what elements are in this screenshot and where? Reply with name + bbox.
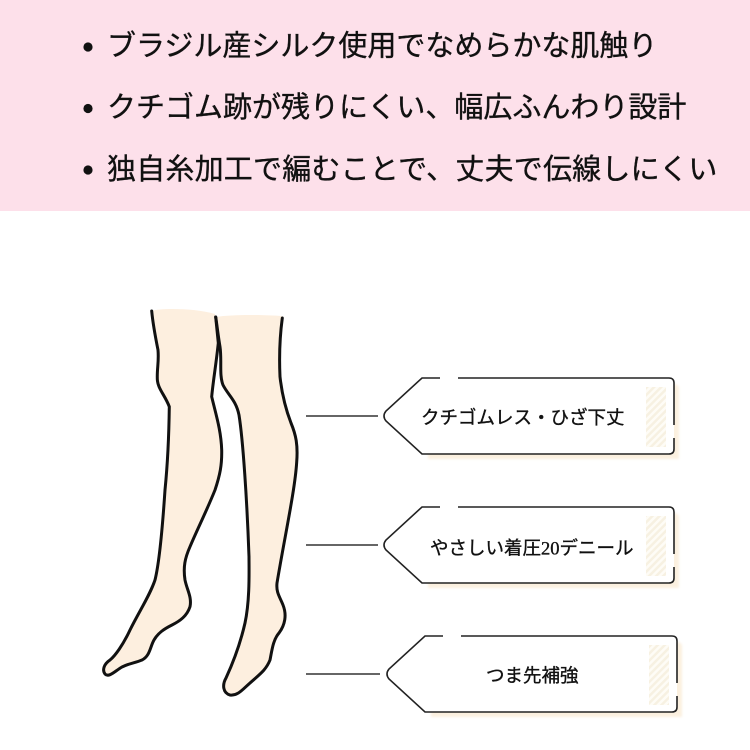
callout label: つま先補強 [486, 665, 579, 686]
connector line [306, 673, 380, 675]
callout: reinforced toe [306, 636, 682, 717]
callout box [384, 378, 674, 454]
connector line [306, 544, 378, 546]
left leg outline [104, 311, 222, 675]
feature line 2: クチゴム跡が残りにくい、幅広ふんわり設計 [107, 91, 686, 124]
callout: gentle compression 20 denier [306, 507, 679, 588]
callout outline [384, 378, 674, 454]
right leg [216, 315, 297, 695]
callout shadow [431, 642, 682, 717]
callout label: クチゴムレス・ひざ下丈 [421, 407, 625, 428]
hatch [649, 645, 669, 705]
callout: knee-high no-band top [306, 378, 679, 459]
hatch [646, 516, 666, 576]
hatch [646, 387, 666, 447]
right leg outline [216, 317, 297, 695]
callout box [387, 636, 677, 712]
panel: pink feature list [0, 0, 750, 211]
callout outline [387, 636, 677, 712]
callout shadow [428, 513, 679, 588]
left leg [104, 309, 222, 675]
callout box [384, 507, 674, 583]
connector line [306, 415, 378, 417]
callout shadow [428, 384, 679, 459]
feature line 3: 独自糸加工で編むことで、丈夫で伝線しにくい [107, 153, 718, 186]
callout outline [384, 507, 674, 583]
feature line 1: ブラジル産シルク使用でなめらかな肌触り [107, 30, 657, 62]
illustration: legs in stockings [104, 309, 297, 695]
callout label: やさしい着圧20デニール [430, 538, 634, 560]
